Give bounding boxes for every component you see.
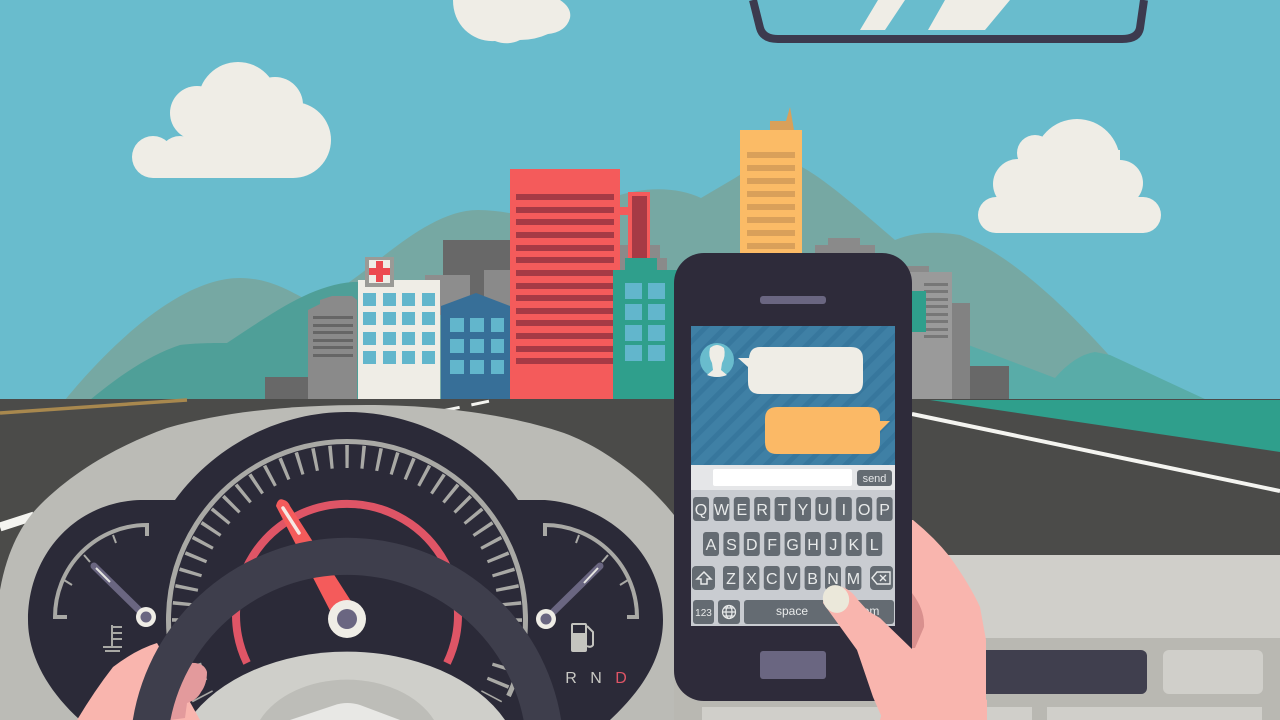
road line: centre: [442, 401, 490, 411]
steering wheel hub: [189, 652, 505, 720]
mirror: [753, 0, 1144, 39]
display panel: [960, 650, 1147, 694]
road: [0, 399, 1280, 720]
keyboard labels: C: [766, 571, 778, 588]
keyboard keys: [692, 497, 894, 624]
vent slots: [702, 707, 1262, 720]
keyboard labels: O: [858, 502, 870, 519]
thumbnail: [818, 581, 854, 617]
icon: contact avatar: [700, 343, 734, 377]
keyboard labels: K: [848, 537, 859, 554]
keyboard labels: Q: [695, 502, 707, 519]
keyboard labels: Z: [726, 571, 736, 588]
message input bar: [691, 465, 895, 490]
keyboard labels: W: [714, 502, 730, 519]
keyboard labels: I: [842, 502, 846, 519]
sky: [0, 0, 1280, 401]
cluster face: [28, 412, 663, 720]
phone body: [674, 253, 912, 701]
icon: thermometer: [103, 625, 122, 651]
mountains: front left: [90, 282, 370, 400]
keyboard labels: Y: [798, 502, 809, 519]
palm shadow: [912, 593, 924, 648]
keyboard labels: L: [870, 537, 879, 554]
phone chat screen: [691, 326, 895, 465]
keyboard labels: F: [767, 537, 777, 554]
gear indicator: D: [615, 670, 627, 687]
keyboard labels: T: [778, 502, 788, 519]
mountains: back range: [65, 162, 1150, 400]
phone home button: [760, 651, 826, 679]
cloud: top: [453, 0, 570, 43]
road line: white left: [0, 516, 34, 527]
keyboard labels: P: [879, 502, 890, 519]
building: grey left: [308, 296, 357, 400]
thumb pressing the screen: [818, 581, 987, 720]
background grey blocks: [265, 237, 1009, 400]
keyboard labels: U: [818, 502, 829, 519]
instrument cluster hood: [0, 405, 674, 720]
dashboard: right side: [674, 555, 1280, 720]
keyboard labels: S: [726, 537, 737, 554]
temperature gauge: [55, 525, 156, 651]
steering wheel rim: [133, 538, 561, 720]
road line: yellow left: [0, 400, 187, 413]
keyboard labels: J: [829, 537, 837, 554]
icon: fuel pump: [571, 623, 593, 652]
keyboard labels: space: [776, 604, 808, 618]
keyboard labels: R: [756, 502, 768, 519]
gear indicator: [565, 670, 627, 687]
dash button: [1163, 650, 1263, 694]
buildings: [265, 107, 1009, 400]
icon: shift key: [697, 572, 711, 584]
gear indicator: N: [590, 670, 602, 687]
keyboard labels: com: [857, 604, 879, 618]
keyboard labels: X: [746, 571, 757, 588]
road line: right: [912, 414, 1280, 491]
speedometer: [168, 441, 526, 697]
phone speaker: [760, 296, 826, 304]
chat bubble: incoming: [738, 347, 863, 394]
keyboard labels: D: [746, 537, 758, 554]
keyboard labels: V: [787, 571, 798, 588]
speedometer needle: [276, 499, 358, 626]
message input bar: send: [863, 473, 886, 485]
needle hub: [328, 600, 366, 638]
icon: backspace key: [872, 572, 890, 584]
fuel gauge: [536, 525, 637, 687]
red zone arc: [236, 504, 458, 663]
building: yellow tower: [740, 107, 802, 256]
chat bubble: outgoing: [765, 407, 890, 454]
keyboard labels: B: [807, 571, 818, 588]
keyboard labels: M: [847, 571, 860, 588]
cloud: right: [978, 119, 1161, 233]
keyboard labels: E: [736, 502, 747, 519]
right hand palm: [880, 520, 986, 720]
keyboard labels: G: [786, 537, 799, 554]
speedometer ticks: [184, 456, 511, 697]
mountains: front right: [950, 338, 1207, 400]
building: hospital: [358, 257, 440, 400]
phone: [674, 253, 912, 701]
speedometer rim: [168, 441, 526, 696]
keyboard labels: [695, 502, 890, 619]
building: red tower: [510, 169, 650, 400]
building: blue: [441, 293, 510, 400]
gear indicator: R: [565, 670, 577, 687]
keyboard labels: 123: [695, 608, 712, 619]
left hand on wheel: [77, 643, 207, 720]
grass: right verge: [930, 400, 1280, 452]
building: grey right: [905, 266, 952, 400]
keyboard labels: N: [827, 571, 839, 588]
icon: globe key: [722, 606, 736, 618]
building: green: [613, 258, 677, 400]
keyboard labels: A: [706, 537, 717, 554]
keyboard labels: H: [807, 537, 819, 554]
keyboard background: [691, 465, 895, 626]
cloud: left: [132, 62, 331, 178]
